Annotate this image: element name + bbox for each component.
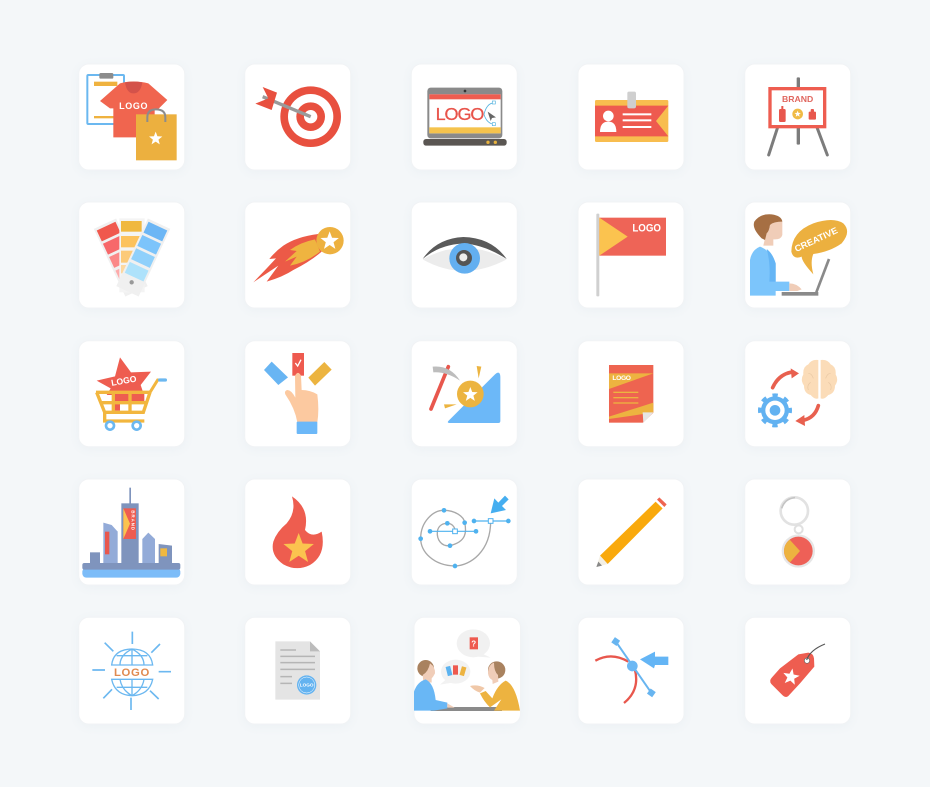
card: vector spiral	[411, 479, 517, 585]
icon: flag with logo: LOGO	[632, 222, 661, 234]
icon: comet star	[253, 227, 344, 282]
icon: cart with logo star: LOGO	[110, 374, 137, 388]
card: branded document	[578, 341, 684, 447]
icon: colour swatch fan	[94, 218, 170, 297]
card: ID badge	[578, 64, 684, 170]
card: hand choosing	[245, 341, 351, 447]
icon: two people discussing colours: ?	[471, 640, 476, 649]
card: brain and gear	[745, 341, 851, 447]
card: target and arrow	[245, 64, 351, 170]
card: brand easel	[745, 64, 851, 170]
card: price tag	[745, 617, 851, 724]
icon: designer with creative speech bubble: CREATIVE	[793, 225, 839, 254]
card: global logo	[79, 617, 185, 724]
card: bezier tool	[578, 617, 684, 724]
icon: hand picking card	[264, 353, 332, 434]
icon: laptop with logo design: LOGO	[436, 104, 484, 124]
icon: pickaxe mining a star	[431, 366, 500, 423]
icon: flame with star	[273, 496, 323, 568]
card: pickaxe and star	[411, 341, 517, 447]
icon: document with logo seal: LOGO	[300, 683, 314, 688]
card: creative designer	[745, 202, 851, 308]
icon: pencil	[596, 497, 667, 567]
icon: tag with star	[770, 644, 825, 697]
card: shooting star	[245, 202, 351, 308]
icon: city skyline with brand tower: BRAND	[130, 510, 135, 531]
card: certificate document	[245, 617, 351, 724]
icon: logo brochure: LOGO	[612, 375, 631, 382]
card: meeting discussion	[414, 617, 520, 724]
icon: ID badge	[595, 92, 668, 142]
card: t-shirt and shopping bag	[79, 64, 185, 170]
card: pencil	[578, 479, 684, 585]
icon: bezier curve with arrow	[595, 637, 668, 703]
icon: easel with brand board: BRAND	[782, 94, 813, 104]
card: eye	[411, 202, 517, 308]
icon: bezier spiral with anchor points	[418, 496, 511, 568]
icon: target with dart	[255, 86, 341, 147]
card: shopping cart	[79, 341, 185, 447]
card: city brand	[79, 479, 185, 585]
icon: keyring tag	[781, 497, 815, 568]
card: colour swatches	[79, 202, 185, 308]
card: laptop logo	[411, 64, 517, 170]
icon: globe with logo: LOGO	[114, 667, 150, 679]
icon: eye	[423, 237, 507, 274]
icon: t-shirt, clipboard and bag: LOGO	[119, 101, 148, 111]
card: flame star	[245, 479, 351, 585]
icon: gear and brain cycle	[760, 360, 837, 426]
card: keyring	[745, 479, 851, 585]
card: logo flag	[578, 202, 684, 308]
